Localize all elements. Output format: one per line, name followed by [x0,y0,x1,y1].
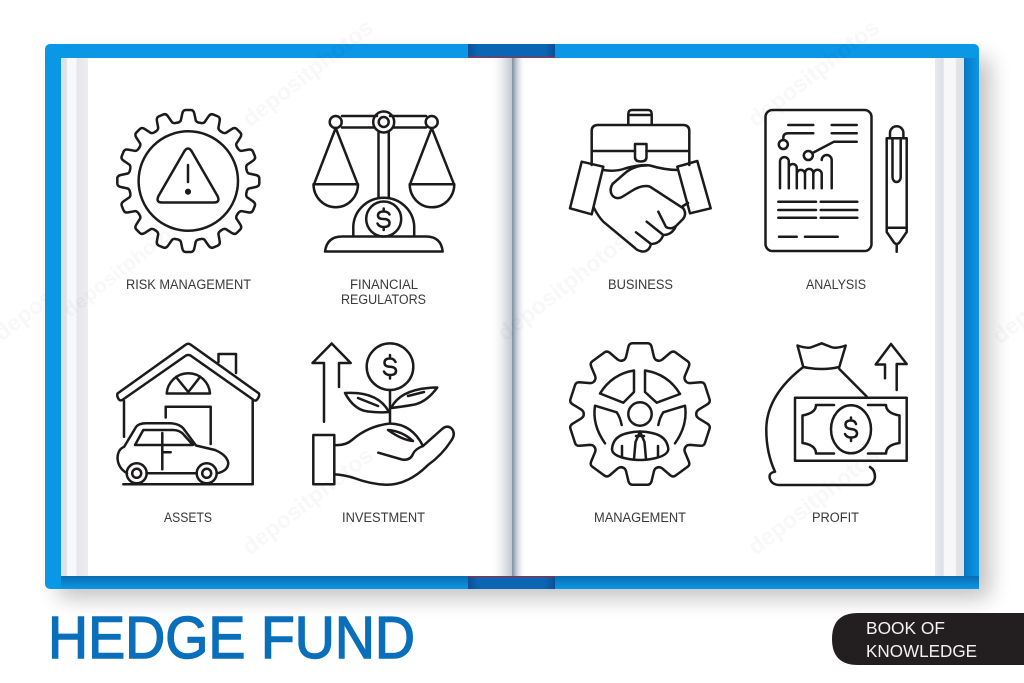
label: business: BUSINESS [608,277,673,292]
icon: profit money bag and banknote [766,343,907,485]
left page edges [61,58,88,576]
watermark outside book [0,228,1024,349]
icon: analysis document and pen [766,110,907,252]
spine band bottom [468,576,555,589]
badge: book of knowledge: BOOK OF [866,618,945,638]
label: financial regulators: FINANCIAL [350,277,418,292]
blue cover [45,44,979,589]
icon: business handshake [570,110,711,252]
icon: risk management gear [117,110,259,252]
icon: assets house and car [117,344,259,484]
centre fold [490,58,526,576]
watermark over pages [59,14,884,560]
watermark over pages: depositphotos [743,14,884,132]
right page edges [935,58,964,576]
badge: book of knowledge [832,613,1024,665]
label: financial regulators [341,277,426,307]
watermark over pages: depositphotos [743,442,884,560]
label: financial regulators: REGULATORS [341,292,426,307]
badge: book of knowledge: KNOWLEDGE [866,641,977,661]
pages [61,58,964,576]
icon: investment hand and plant [312,343,454,485]
label: assets: ASSETS [164,510,212,525]
watermark over pages: depositphotos [237,442,378,560]
watermark over pages: depositphotos [59,216,185,322]
open book [45,44,979,589]
watermark over pages: depositphotos [492,228,633,346]
icon: financial regulators scales [314,112,454,252]
label: profit: PROFIT [812,510,859,525]
spine band top [468,44,555,58]
label: analysis: ANALYSIS [806,277,866,292]
icon: management gear with person [567,343,713,485]
watermark over pages: depositphotos [237,14,378,132]
label: investment: INVESTMENT [342,510,425,525]
book shadow [58,58,990,598]
title: HEDGE FUND [48,605,415,671]
label: risk management: RISK MANAGEMENT [126,277,251,292]
label: management: MANAGEMENT [594,510,686,525]
